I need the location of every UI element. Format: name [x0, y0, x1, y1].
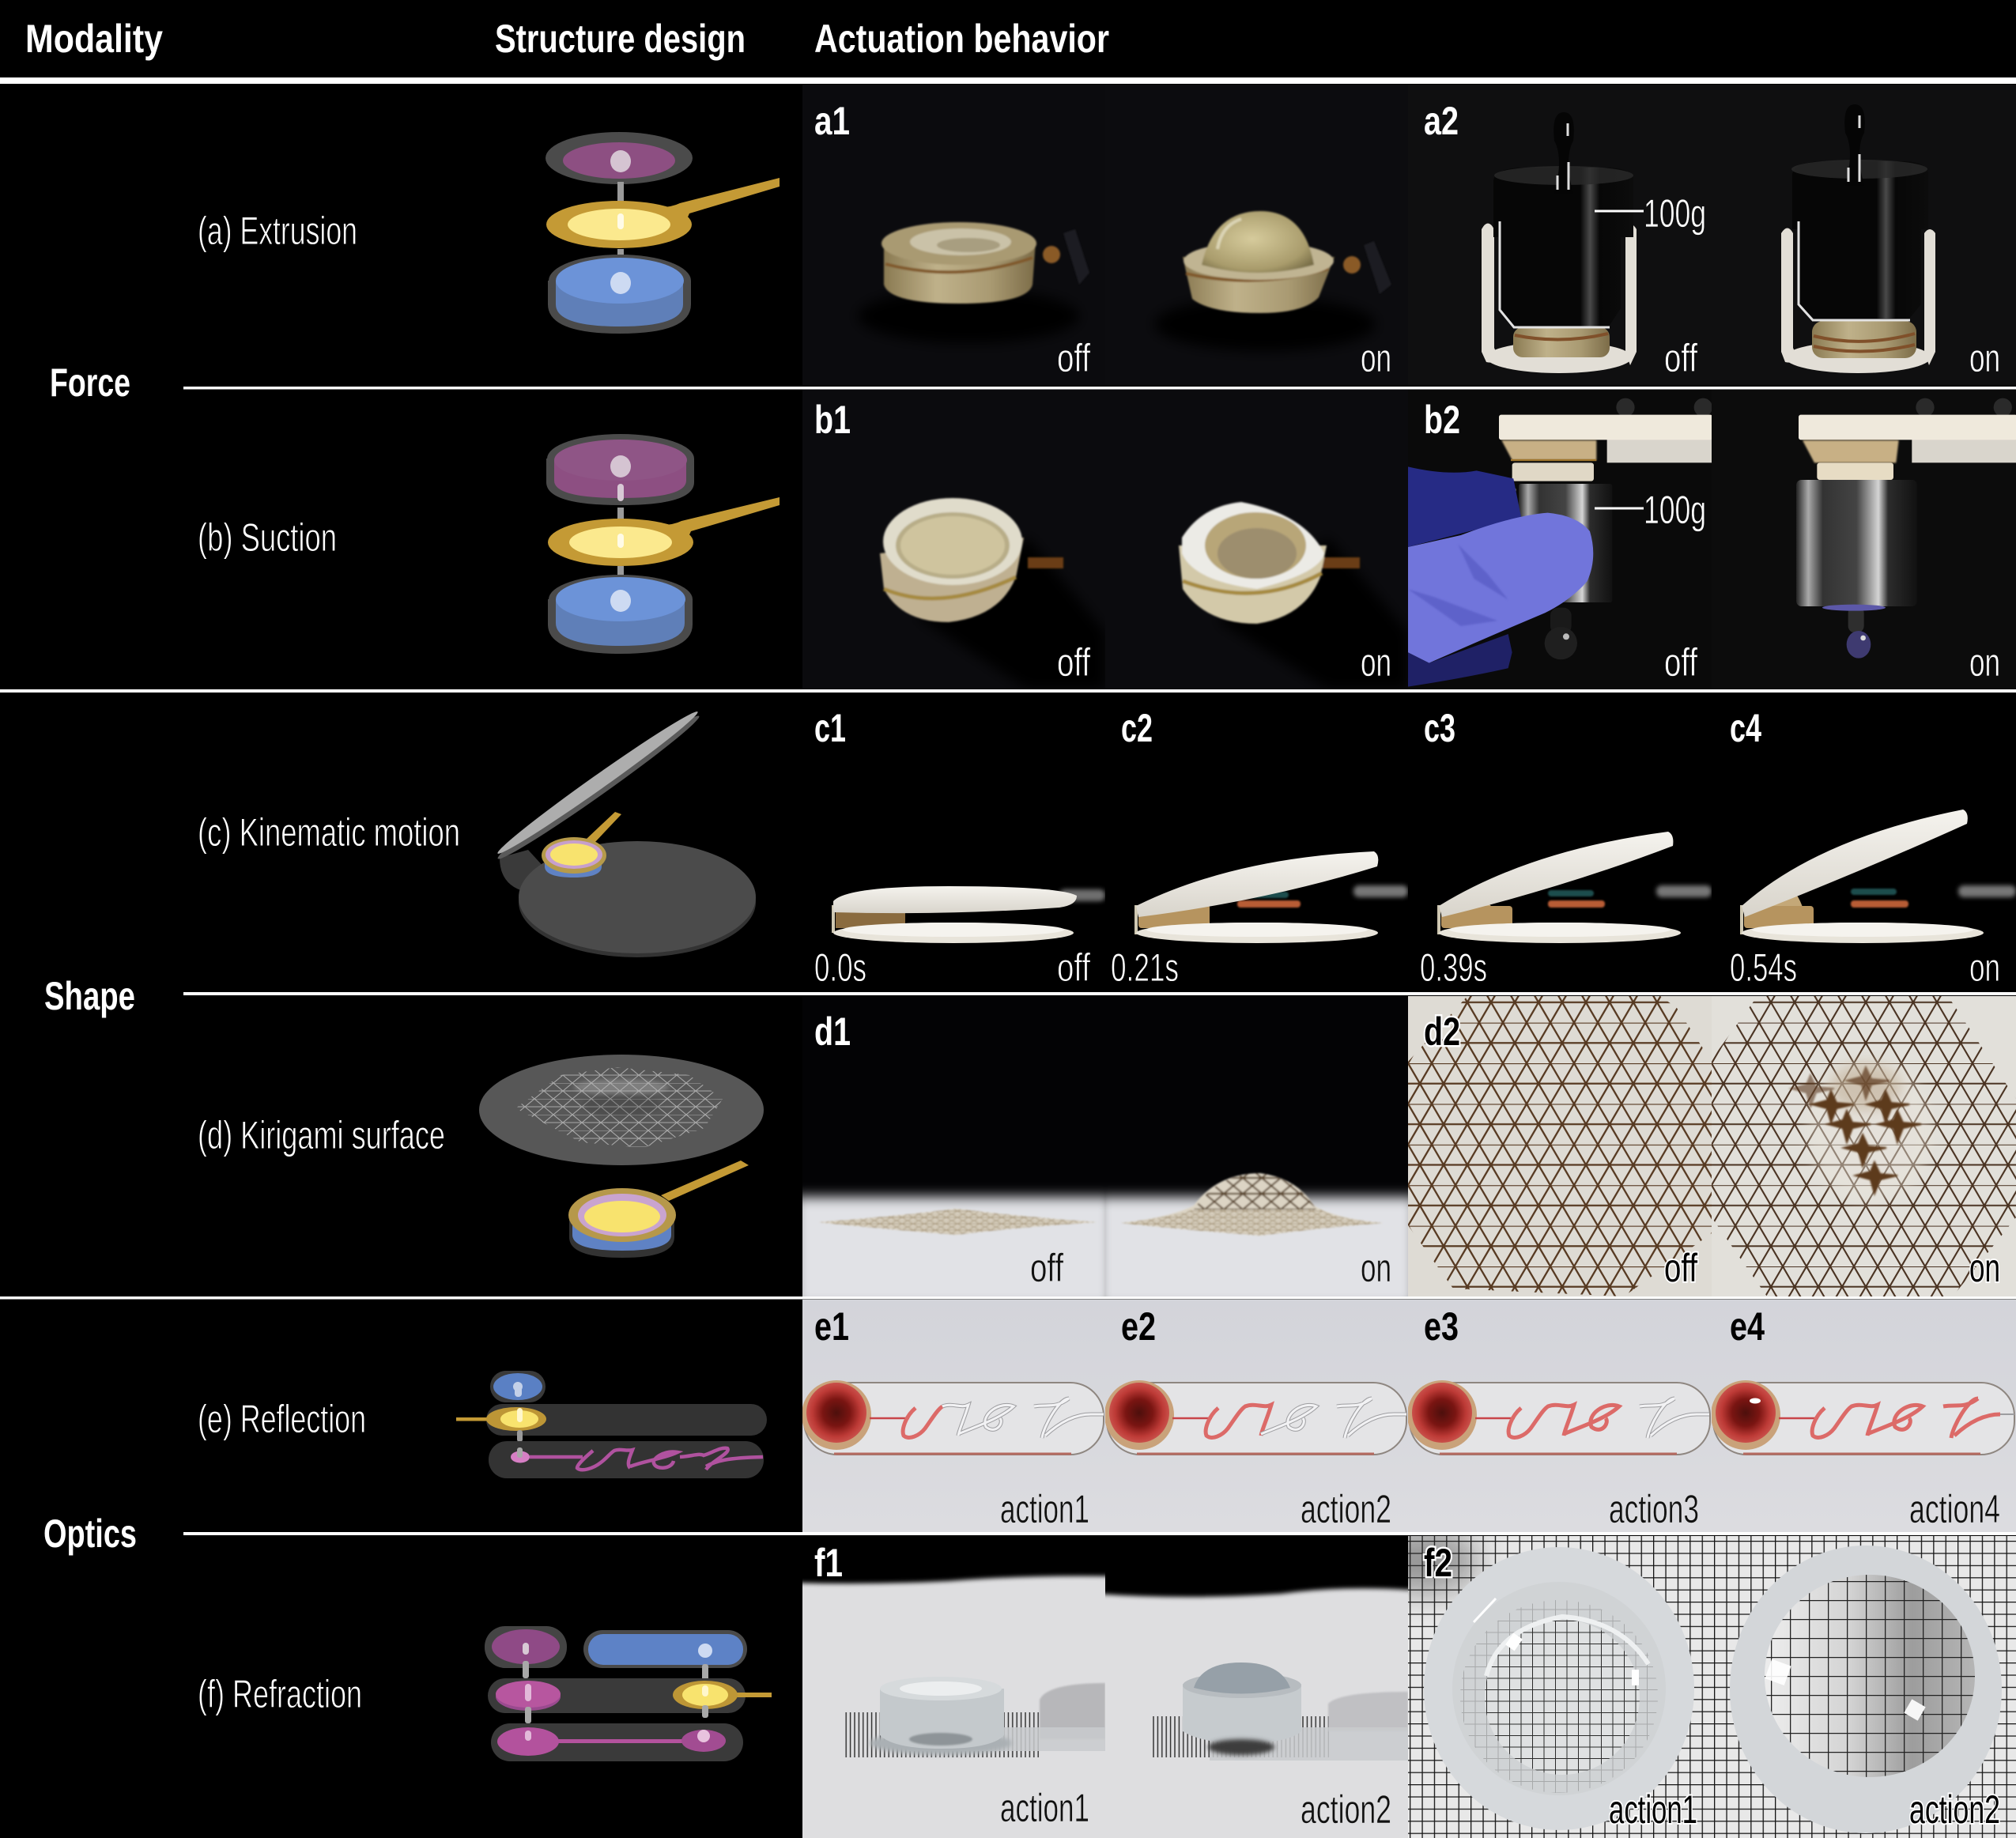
icon: refraction structure [485, 1626, 772, 1761]
actuator body off [882, 222, 1089, 304]
label: off: off [1057, 640, 1090, 685]
photo d1 on [1105, 1172, 1408, 1296]
photo a2 on [1712, 85, 2016, 385]
photo a1 off [802, 85, 1105, 385]
label: f2: f2 [1424, 1541, 1452, 1585]
label: 0.54s: 0.54s [1730, 945, 1797, 990]
heading: Actuation behavior: Actuation behavior [814, 17, 1109, 61]
label: off: off [1030, 1246, 1063, 1290]
lens outer ring [1730, 1546, 2002, 1833]
row label: (a) Extrusion: (a) Extrusion [198, 209, 357, 253]
label: e1: e1 [814, 1304, 849, 1349]
icon: kinematic hinge structure [493, 706, 756, 957]
holder and weight [1482, 112, 1637, 373]
label: e2: e2 [1121, 1304, 1156, 1349]
rig and weight [1796, 398, 2016, 659]
icon: reflection structure [456, 1371, 767, 1478]
photo e1 [802, 1300, 1105, 1532]
header row [25, 17, 1109, 61]
row label: (e) Reflection: (e) Reflection [198, 1397, 366, 1441]
label: d2: d2 [1424, 1010, 1460, 1054]
photo d2 off [1408, 996, 1712, 1296]
label: c1: c1 [814, 706, 846, 750]
label: off: off [1057, 336, 1090, 380]
label: c4: c4 [1730, 706, 1761, 750]
row label: (f) Refraction: (f) Refraction [198, 1672, 362, 1716]
label: f1: f1 [814, 1541, 843, 1585]
actuator body on [1183, 211, 1391, 313]
label: b1: b1 [814, 398, 851, 442]
label: a2: a2 [1424, 99, 1459, 143]
photo c1 [814, 706, 1105, 990]
photo b1 on [1105, 389, 1408, 689]
label: off: off [1664, 1246, 1697, 1290]
flat kirigami sheet [818, 1209, 1097, 1235]
label: d1: d1 [814, 1010, 851, 1054]
hinge opening [1439, 832, 1712, 943]
photo c3 [1420, 706, 1712, 990]
label: on: on [1361, 336, 1391, 380]
photo e3 [1408, 1300, 1712, 1532]
photo c2 [1111, 706, 1408, 990]
grid strip and lens on [1152, 1663, 1408, 1761]
label: on: on [1969, 945, 2000, 990]
label: on: on [1969, 336, 2000, 380]
photo b2 on [1712, 389, 2016, 689]
label: 0.39s: 0.39s [1420, 945, 1487, 990]
photo b2 off [1408, 389, 1712, 689]
hinge open [1742, 810, 2016, 943]
callout: 100g [1595, 191, 1706, 236]
photo a1 on [1105, 85, 1408, 385]
photo a2 off [1408, 85, 1712, 385]
star-shaped openings [1791, 1067, 1921, 1194]
label: 0.0s: 0.0s [814, 945, 866, 990]
label: on: on [1361, 1246, 1391, 1290]
label: off: off [1664, 336, 1697, 380]
row label: (b) Suction: (b) Suction [198, 515, 337, 560]
lens outer ring [1424, 1547, 1694, 1830]
grid strip and lens off [845, 1677, 1105, 1757]
label: e4: e4 [1730, 1304, 1765, 1349]
actuator open [880, 498, 1063, 622]
label: on: on [1969, 640, 2000, 685]
hinge closed [833, 886, 1105, 943]
modality label: Shape: Shape [44, 974, 135, 1018]
lens center with grid [1474, 1598, 1648, 1775]
photo c4 [1730, 706, 2016, 990]
photo f2 action1 [1408, 1536, 1712, 1838]
divider lines [0, 77, 2016, 1535]
uist card, action 3 [1407, 1380, 1710, 1455]
raised kirigami dome [1121, 1173, 1384, 1236]
modality label: Force: Force [50, 360, 130, 405]
label: a1: a1 [814, 99, 850, 143]
label: on: on [1969, 1246, 2000, 1290]
photo f1 action2 [1105, 1584, 1408, 1838]
holder and weight [1781, 104, 1935, 373]
photo f2 action2 [1712, 1536, 2016, 1838]
icon: kirigami surface structure [479, 1055, 764, 1258]
uist card, action 4 [1711, 1380, 2014, 1455]
label: off: off [1664, 640, 1697, 685]
label: off: off [1057, 945, 1090, 990]
label: e3: e3 [1424, 1304, 1459, 1349]
heading: Modality: Modality [25, 17, 163, 61]
label: 0.21s: 0.21s [1111, 945, 1179, 990]
photo e2 [1105, 1300, 1408, 1532]
icon: suction structure [546, 434, 780, 654]
modality label: Optics: Optics [43, 1512, 137, 1556]
uist card, action 2 [1104, 1380, 1406, 1455]
uist card, action 1 [802, 1380, 1104, 1455]
actuator sucked in [1179, 502, 1360, 624]
row label: (c) Kinematic motion: (c) Kinematic motion [198, 810, 460, 855]
label: b2: b2 [1424, 398, 1460, 442]
photo d1 off [802, 1010, 1105, 1296]
lens dome with grid [1765, 1575, 1975, 1777]
label: c2: c2 [1121, 706, 1153, 750]
icon: extrusion structure [546, 132, 780, 334]
photo f1 action1 [802, 1541, 1105, 1838]
row label: (d) Kirigami surface: (d) Kirigami surface [198, 1113, 445, 1157]
rig, weight and glove [1408, 398, 1712, 687]
photo b1 off [802, 389, 1105, 689]
label: on: on [1361, 640, 1391, 685]
photo e4 [1712, 1300, 2016, 1532]
label: c3: c3 [1424, 706, 1455, 750]
kirigami lattice flat [1408, 996, 1712, 1296]
photo d2 on [1712, 996, 2016, 1296]
kirigami lattice deformed [1712, 996, 2016, 1296]
heading: Structure design: Structure design [495, 17, 746, 61]
callout: 100g [1595, 488, 1706, 532]
hinge opening [1136, 851, 1408, 943]
